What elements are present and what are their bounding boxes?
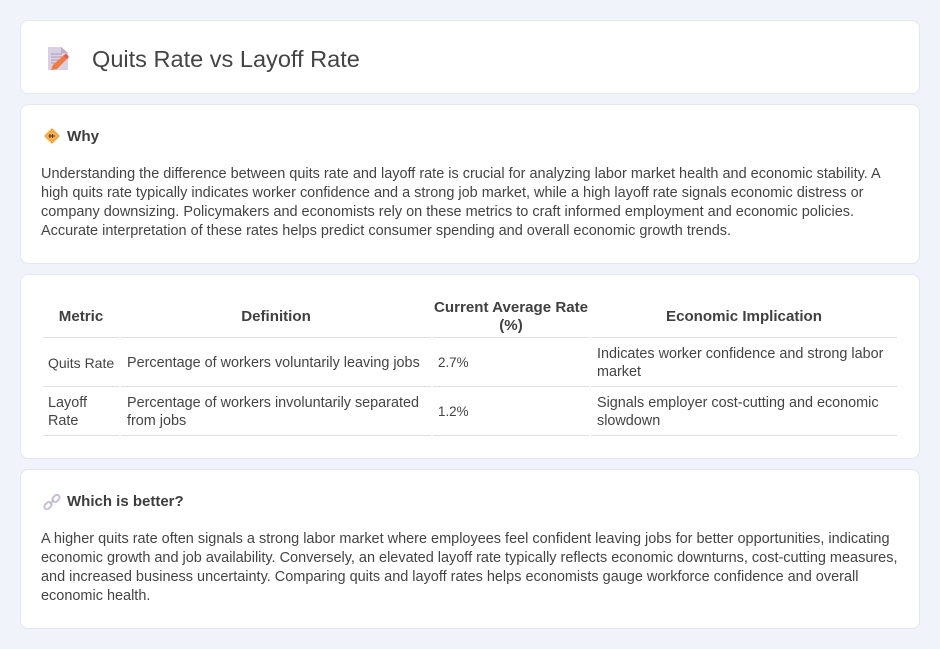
text block: which is better explanation: economic health.: [41, 588, 150, 604]
table row: quits rate: 2.7%: [438, 355, 469, 370]
table row: layoff rate: 1.2%: [438, 404, 469, 419]
table row: layoff rate: Layoff: [48, 395, 87, 411]
table header row: [43, 299, 897, 338]
table header row: Economic Implication: [666, 308, 822, 325]
text block: which is better explanation: economic growth and job availability. Conversely, an elevated layoff rate typically reflects economic downturns, cost-cutting measures,: [41, 550, 897, 566]
table header row: (%): [499, 317, 523, 334]
heading: why: Why: [67, 128, 99, 145]
text block: which is better explanation: [41, 531, 897, 604]
table row: quits rate: Quits Rate: [48, 355, 114, 371]
table row: quits rate: Percentage of workers voluntarily leaving jobs: [127, 355, 420, 371]
table row: layoff rate: Rate: [48, 413, 78, 429]
text block: which is better explanation: A higher quits rate often signals a strong labor market where employees feel confident leaving jobs for better opportunities, indicating: [41, 531, 890, 547]
text block: why explanation: [41, 166, 881, 239]
icon: link: [44, 494, 60, 510]
panel: which is better: [20, 469, 920, 629]
table row: quits rate: [43, 346, 897, 387]
text block: which is better explanation: and increased business uncertainty. Comparing quits and layoff rates helps economists gauge workforce confidence and overall: [41, 569, 858, 585]
icon: warning diamond: [44, 128, 60, 144]
table row: layoff rate: [43, 395, 897, 436]
table row: quits rate: Indicates worker confidence and strong labor: [597, 346, 883, 362]
panel: title header: [20, 20, 920, 94]
table row: layoff rate: Percentage of workers involuntarily separated: [127, 395, 419, 411]
table row: layoff rate: from jobs: [127, 413, 186, 429]
table header row: Definition: [241, 308, 311, 325]
heading: which is better: Which is better?: [67, 493, 184, 510]
title: Quits Rate vs Layoff Rate: [92, 46, 360, 72]
text block: why explanation: Understanding the difference between quits rate and layoff rate is crucial for analyzing labor market health and economic stability. A: [41, 166, 881, 182]
table row: layoff rate: Signals employer cost-cutting and economic: [597, 395, 879, 411]
table header row: Metric: [59, 308, 103, 325]
text block: why explanation: company downsizing. Policymakers and economists rely on these metrics to craft informed employment and economic policies.: [41, 204, 854, 220]
panel: why: [20, 104, 920, 264]
table row: layoff rate: slowdown: [597, 413, 660, 429]
text block: why explanation: Accurate interpretation of these rates helps predict consumer spending and overall economic growth trends.: [41, 223, 731, 239]
icon: memo with pencil: [48, 47, 69, 70]
table header row: Current Average Rate: [434, 299, 588, 316]
text block: why explanation: high quits rate typically indicates worker confidence and a strong job market, while a high layoff rate signals economic distress or: [41, 185, 863, 201]
panel: comparison table: [20, 274, 920, 459]
table row: quits rate: market: [597, 364, 641, 380]
